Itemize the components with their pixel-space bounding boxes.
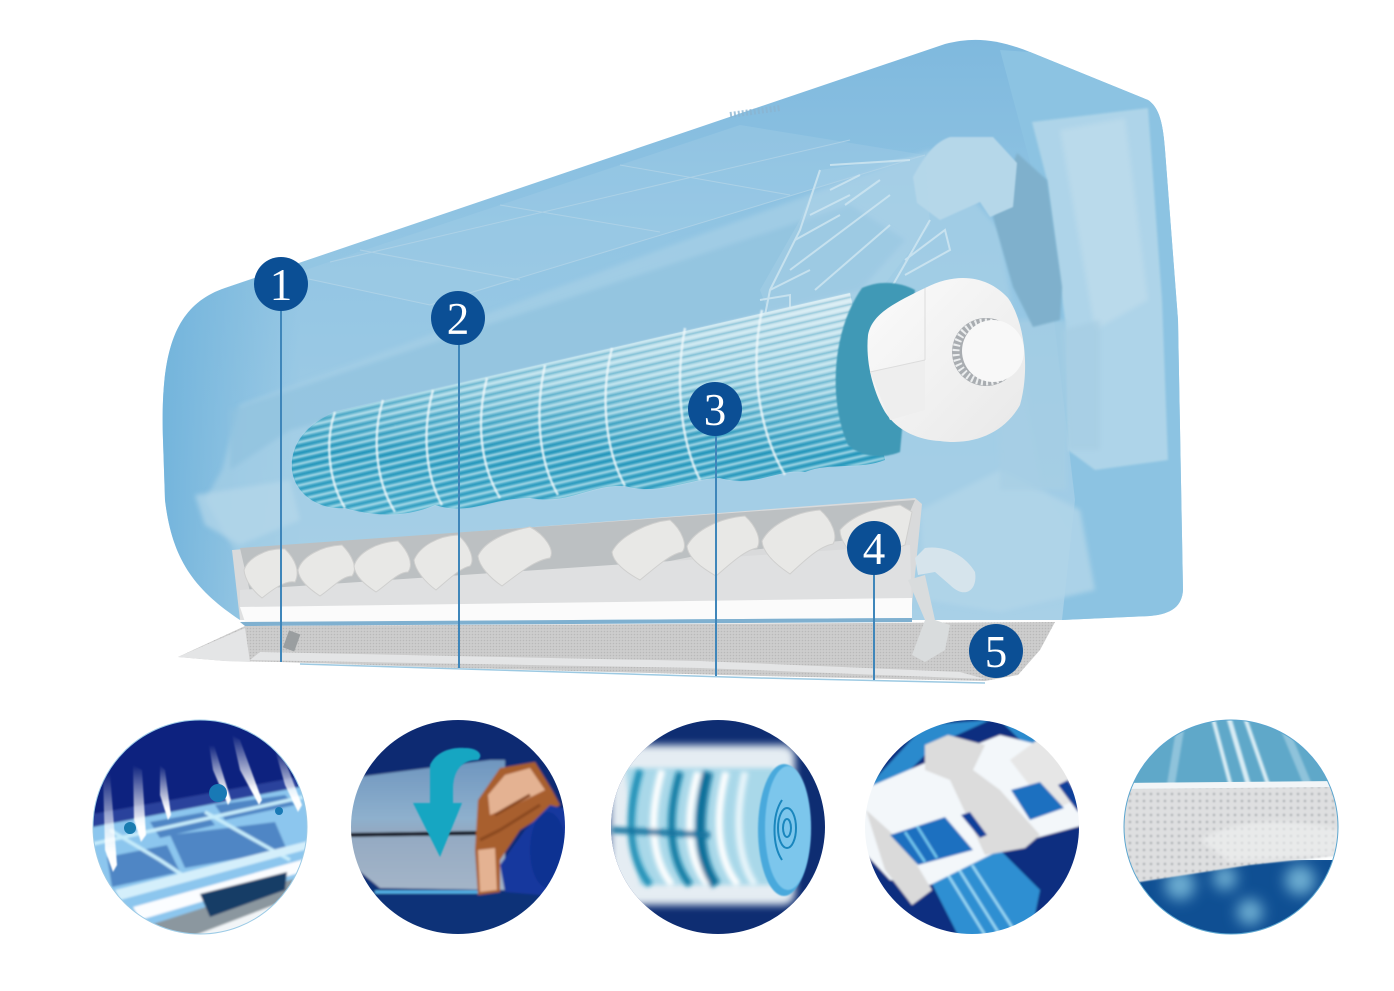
detail circle 1: air filter <box>88 715 312 939</box>
white vanes <box>862 735 1084 885</box>
air filter grid on top <box>290 108 925 305</box>
circle outline 1 <box>93 720 307 934</box>
detail circle 5: mesh outlet <box>1119 715 1343 940</box>
dark duct behind pipe <box>993 153 1062 327</box>
teal arrow <box>413 748 480 857</box>
swing link arm <box>908 547 975 662</box>
cross-flow fan <box>292 293 885 514</box>
callout 4 <box>847 521 901 680</box>
fan blade segment rings <box>329 310 785 512</box>
mesh lower blue edge <box>300 664 985 683</box>
callout 1: 1 <box>270 260 292 310</box>
side control panel <box>997 108 1168 490</box>
detail circle 2: evaporator <box>346 715 570 940</box>
blue motor <box>500 805 570 895</box>
detail circle 3: cross-flow fan <box>606 715 830 939</box>
detail circle 4: air guide vanes <box>860 715 1084 939</box>
callout 3 <box>688 382 742 676</box>
gear ring <box>952 318 1020 386</box>
translucent casing <box>163 40 1183 620</box>
callout 5: 5 <box>985 627 1007 677</box>
motor end cap <box>867 278 1025 442</box>
fan end ring <box>836 283 915 456</box>
sensor clip <box>283 630 300 651</box>
callout 3: 3 <box>704 385 726 435</box>
blurred vapour clouds <box>1165 865 1315 925</box>
louvers <box>244 505 912 598</box>
back guide bar with louvers <box>232 498 922 626</box>
heat exchanger coil <box>760 155 950 400</box>
callout 2 <box>431 291 485 668</box>
dust particles <box>209 784 227 802</box>
mesh panel lip highlights <box>178 628 985 679</box>
callout 1 <box>254 257 308 662</box>
air conditioner unit <box>163 40 1183 683</box>
refrigerant pipe elbow <box>913 137 1017 220</box>
blue air channels <box>890 817 973 865</box>
inner housing <box>195 150 1095 612</box>
callout 2: 2 <box>447 294 469 344</box>
downward air streams <box>103 735 302 872</box>
fan end disc <box>758 764 810 896</box>
callout 4: 4 <box>863 524 885 574</box>
copper tubes <box>475 762 560 895</box>
callout 5 <box>969 624 1023 678</box>
mesh air outlet panel <box>178 622 1055 681</box>
circle outline 5 <box>1124 720 1338 934</box>
